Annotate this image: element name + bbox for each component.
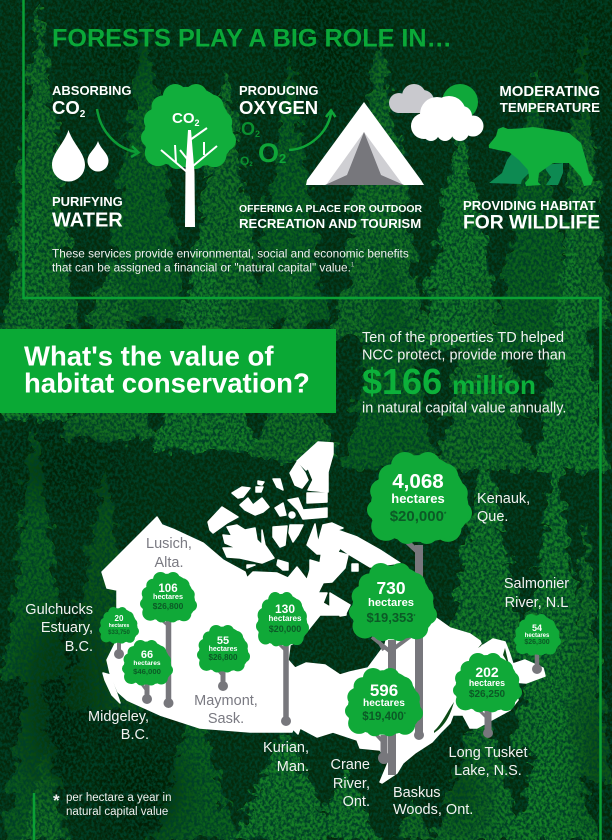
tree: Kurian: $20,000 [269,624,301,634]
banner: habitat conservation question [0,329,336,413]
label: Kurian: Kurian, [263,740,309,756]
label: Long Tusket Lake: Lake, N.S. [454,763,522,779]
label: purifying water: PURIFYING [52,194,123,209]
text: services description [52,246,409,274]
arrow: oxygen out of tree [289,110,336,150]
icon: tree absorbing CO2 [141,84,236,227]
label: producing oxygen [239,83,318,118]
callout: 166 million [362,330,566,417]
callout: 166 million: Ten of the properties TD helped [362,330,564,346]
label: Baskus Woods: Woods, Ont. [393,802,473,818]
label: Baskus Woods: Baskus [393,785,441,801]
tree: Midgeley: 66 [141,649,153,661]
label: producing oxygen: PRODUCING [239,83,318,98]
tree: Kurian: hectares [269,614,302,623]
tree: Kurian: 130 [275,602,295,616]
tree: Kenauk: * [444,512,447,518]
label: Kenauk: Que. [477,509,508,525]
label: Kenauk [477,491,530,525]
O2 molecules: 2 [279,151,286,166]
tree: Lusich: $26,800 [153,601,184,611]
tree: Kenauk: 4,068 [392,470,444,493]
label: moderating temperature: MODERATING [499,84,600,100]
callout: 166 million: $166 million [362,361,536,402]
icon: bear [489,127,593,186]
label: Maymont: Maymont, [194,693,258,709]
label: Kurian [263,740,309,775]
text: services description: that can be assigned a financial or "natural capital" value. [52,260,351,274]
tree: Crane River: $19,400 [362,711,404,723]
text: services description: 1 [351,262,355,268]
tree: Baskus Woods: * [414,614,416,620]
text: services description: These services provide environmental, social and economic benefits [52,246,409,260]
label: moderating temperature: TEMPERATURE [500,100,600,115]
tree: Crane River: * [404,712,406,718]
tree: Lusich: hectares [153,592,183,601]
label: absorbing CO2: 2 [80,109,86,120]
label: Long Tusket Lake [448,745,528,779]
O2 molecules: O [258,138,279,168]
tree: Salmonier River: hectares [525,633,550,639]
tree: Gulchucks Estuary: hectares [109,623,129,629]
tree: Kenauk: hectares [391,491,445,506]
tree: Baskus Woods: $19,353 [367,610,414,625]
tree: Gulchucks Estuary [99,607,139,659]
label: absorbing CO2: ABSORBING [52,83,131,98]
label: Baskus Woods [393,785,473,818]
callout: 166 million: in natural capital value annually. [362,401,566,417]
tree: Baskus Woods [349,563,437,775]
label: outdoor recreation: OFFERING A PLACE FOR OUTDOOR [239,204,422,215]
label: Lusich: Lusich, [146,536,192,552]
label: Maymont: Sask. [208,711,244,727]
label: purifying water: WATER [52,210,123,232]
tree: Baskus Woods: hectares [368,597,414,609]
label: absorbing CO2: CO [52,97,80,118]
label: Gulchucks Estuary [25,602,93,655]
tree: Long Tusket Lake [453,653,522,738]
tree: Salmonier River: 54 [532,623,542,633]
tree: Salmonier River: $26,300 [524,639,550,646]
tree: Baskus Woods: 730 [376,578,406,598]
footnote: natural capital value [66,806,168,818]
tree: Long Tusket Lake: $26,250 [469,689,506,700]
label: outdoor recreation: RECREATION AND TOURISM [239,216,421,231]
tree: Crane River: hectares [363,698,405,709]
label: purifying water [52,194,123,232]
tree: Maymont [197,625,250,691]
label: Long Tusket Lake: Long Tusket [448,745,528,761]
title: FORESTS PLAY A BIG ROLE IN… [52,24,452,52]
tree: Midgeley: $46,000 [133,667,161,676]
green frame line: bottom left [33,793,35,840]
tree: Maymont: $26,800 [209,653,238,662]
label: Salmonier River [504,576,569,611]
label: Gulchucks Estuary: Gulchucks [25,602,93,618]
label: Maymont [194,693,258,727]
label: Crane River: Ont. [343,794,370,810]
icon: tree absorbing CO2: CO [172,110,194,127]
O2 molecules [240,119,286,168]
icon: sun and clouds [389,84,484,141]
footnote [53,791,171,818]
tree: Crane River: 596 [370,681,398,700]
tree: Long Tusket Lake: 202 [475,664,499,680]
tree: Kenauk [367,452,472,740]
Hudson Bay and gulf inlets [434,640,509,733]
footnote: per hectare a year in [66,792,171,804]
icon: tree absorbing CO2: 2 [194,118,200,128]
label: Lusich [146,536,192,571]
tree: Kurian [256,592,309,726]
label: Midgeley: B.C. [121,727,149,743]
tree: Lusich: 106 [158,583,178,595]
O2 molecules: 2 [249,162,253,168]
label: Crane River: River, [333,776,370,792]
tree: Midgeley: hectares [133,660,161,667]
banner: habitat conservation question: habitat conservation? [24,368,310,398]
tree: Midgeley [122,640,173,704]
label: Salmonier River: River, N.L [505,595,568,611]
map of Canada [102,442,545,783]
label: absorbing CO2 [52,83,131,120]
arrow: CO2 into tree [97,109,138,157]
callout: 166 million: NCC protect, provide more than [362,348,566,364]
icon: water drops [52,130,108,182]
label: Kurian: Man. [277,759,309,775]
label: Lusich: Alta. [154,555,184,571]
tree: Maymont: hectares [209,646,238,653]
tree: Gulchucks Estuary: 20 [115,614,124,623]
label: Midgeley: Midgeley, [88,709,149,725]
tree: Lusich [140,572,197,708]
label: producing oxygen: OXYGEN [239,97,318,118]
tree: Long Tusket Lake: hectares [469,678,505,688]
label: Crane River [330,757,370,810]
label: Crane River: Crane [330,757,370,773]
tree: Gulchucks Estuary: $33,750 [108,630,130,636]
tree: Salmonier River [514,614,561,674]
label: Salmonier River: Salmonier [504,576,569,592]
label: habitat for wildlife: PROVIDING HABITAT [463,198,596,213]
O2 molecules: O [241,119,255,139]
tree: Kenauk: $20,000 [390,508,444,525]
label: outdoor recreation [239,204,422,231]
label: Midgeley [88,709,149,743]
label: habitat for wildlife: FOR WILDLIFE [463,212,600,234]
tree: Maymont: 55 [217,635,229,647]
icon: tent [306,102,424,185]
label: Gulchucks Estuary: Estuary, [41,620,93,636]
label: Kenauk: Kenauk, [477,491,530,507]
label: moderating temperature [499,84,600,115]
banner: habitat conservation question: What's the value of [24,340,274,372]
O2 molecules: 2 [255,129,260,139]
O2 molecules: O [240,154,249,168]
label: habitat for wildlife [463,198,600,234]
label: Gulchucks Estuary: B.C. [65,639,93,655]
tree: Crane River [345,668,423,764]
footnote: * [53,791,60,810]
